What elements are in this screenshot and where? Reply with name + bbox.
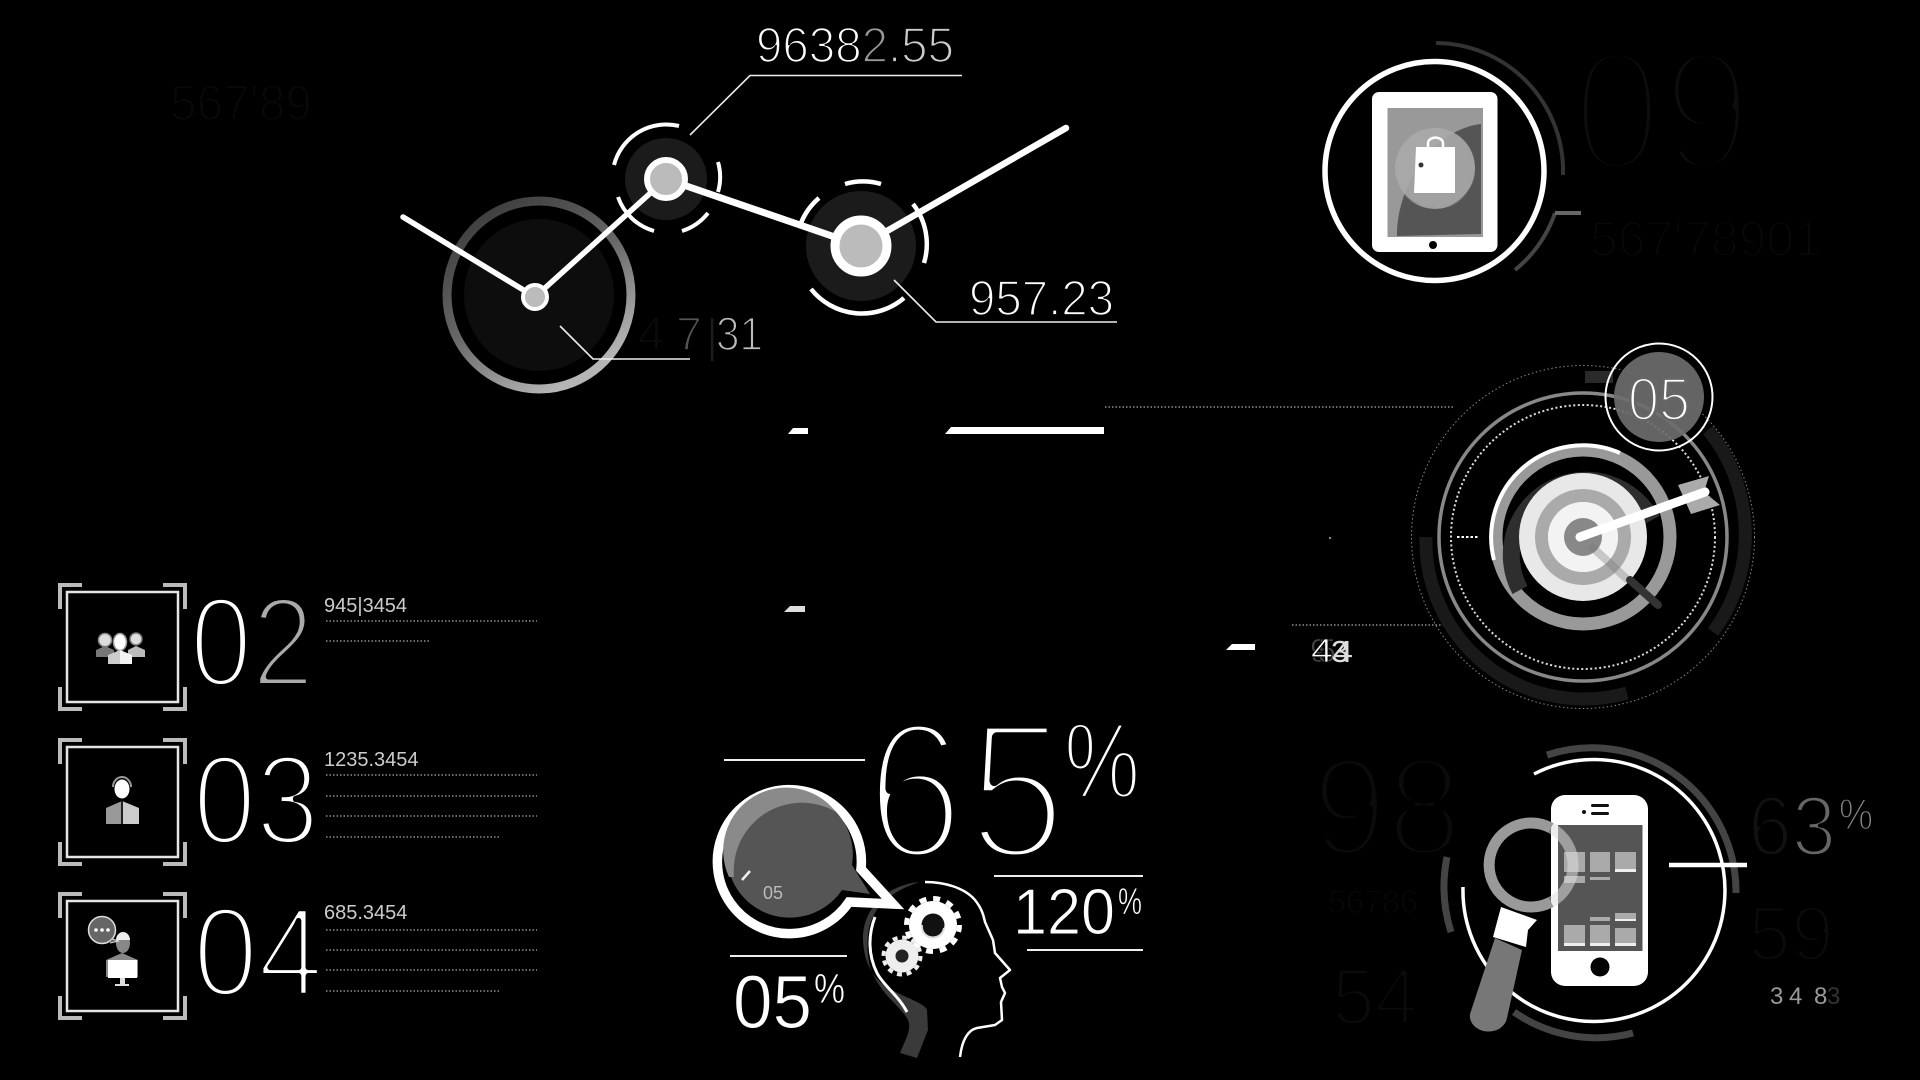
badge: 05: 05: [1628, 366, 1690, 433]
back band: [863, 882, 928, 1058]
phone panel: [1444, 748, 1747, 1038]
stat: 63%: %: [1839, 790, 1873, 839]
circle outline: [1325, 62, 1544, 280]
glitch bars and fragments: [784, 407, 1453, 650]
list row 02: [60, 571, 537, 713]
back highlight: [870, 917, 907, 1012]
faint numbers: phone panel: 54: [1332, 952, 1418, 1041]
value: 957.23: 957.23: [969, 272, 1114, 326]
faint number: 09: 09: [1572, 15, 1752, 207]
magnifying glass: [1470, 823, 1573, 1032]
head outline: [925, 882, 1010, 1057]
head with gears: [863, 882, 1010, 1058]
icon: large gear: [906, 898, 960, 952]
number 03: 03: [193, 729, 319, 871]
digits: 3 4 8 3: [1770, 983, 1840, 1010]
stat: 05%: [730, 956, 847, 1044]
tablet icon panel: [1325, 43, 1581, 280]
value: 957.23: [894, 272, 1117, 326]
bullseye: [1491, 445, 1670, 624]
overlapping digits: 43: 3: [1331, 634, 1349, 669]
icon: support person: [88, 916, 138, 986]
frame with team icon: [60, 585, 185, 709]
list row 04: [60, 881, 537, 1023]
node halo: second point: [614, 124, 720, 231]
node: second point: [647, 160, 685, 198]
label and lines: 945|3454: [324, 595, 407, 617]
value: 47|31: [560, 307, 763, 362]
target panel: [1412, 344, 1754, 708]
stat: 05%: 05: [733, 960, 812, 1044]
overlapping digits: 43: 4: [1333, 634, 1353, 669]
trend line: [403, 128, 1066, 297]
arrow: [1580, 476, 1720, 537]
faint numbers: phone panel: 59: [1748, 889, 1834, 977]
stat: 65%: 5: [968, 681, 1066, 900]
icon: person: [106, 777, 139, 824]
faint number: 567'78901: 567'78901: [1590, 211, 1822, 267]
shopping bag icon: [1414, 138, 1455, 193]
value: 96382.55: [690, 19, 962, 135]
stat: 120%: %: [1118, 881, 1142, 922]
faint numbers: phone panel: 56786: [1328, 884, 1418, 920]
node: third point: [835, 220, 887, 272]
speech bubble: 05: [763, 883, 783, 903]
stat: 63%: 63: [1748, 779, 1836, 873]
digits: 3 4 8 3: 4: [1789, 983, 1802, 1010]
value: 47|31: 31: [716, 307, 763, 360]
phone device: [1551, 795, 1648, 986]
faint numbers: phone panel: [1312, 728, 1834, 1041]
overlapping digits: 43: 9.5: [1310, 632, 1336, 669]
app tiles: [1564, 852, 1636, 946]
stat: 05%: %: [814, 965, 845, 1012]
frame with person icon: [60, 740, 185, 864]
number 02: 02: [190, 571, 314, 713]
outer arcs: [1436, 43, 1581, 270]
icon: small gear: [884, 938, 920, 974]
digits: 3 4 8 3: 3: [1827, 983, 1840, 1010]
overlapping digits: 43: [1310, 632, 1353, 669]
value: 47|31: 4: [638, 307, 664, 360]
pointer line: [1669, 863, 1747, 867]
label and lines: [324, 749, 537, 837]
hud rings: [1412, 366, 1754, 708]
frame with support icon: [60, 894, 185, 1018]
stat: 120%: 120: [1013, 875, 1115, 948]
overlapping digits: 43: 4: [1311, 632, 1333, 669]
node: first point: [523, 285, 547, 309]
list row 03: [60, 729, 537, 871]
node halo: third point: [801, 181, 927, 314]
stat: 65%: %: [1064, 700, 1140, 821]
icon: team: [96, 633, 145, 664]
digits: 3 4 8 3: 3: [1770, 983, 1783, 1010]
label and lines: 685.3454: [324, 902, 407, 924]
faint label: top left: 567'89: [170, 75, 312, 131]
tablet device: [1372, 92, 1498, 252]
label and lines: 1235.3454: [324, 749, 419, 771]
stat: 65%: 6: [866, 681, 964, 900]
value: 47|31: 7: [676, 307, 702, 360]
outer arcs: [1444, 748, 1736, 1038]
line chart panel: [403, 124, 1066, 389]
value: 96382.55: 96382.55: [756, 19, 954, 73]
faint numbers: phone panel: 98: [1312, 728, 1462, 885]
white ring: [1463, 759, 1725, 1021]
number 04: 04: [193, 881, 323, 1023]
speech bubble: [717, 788, 893, 934]
label and lines: [324, 902, 537, 991]
digits: 3 4 8 3: 8: [1814, 983, 1827, 1010]
stat: 65%: [724, 681, 1140, 900]
value: 47|31: |: [706, 309, 718, 362]
badge: 05: [1606, 344, 1712, 450]
node halo: first point: [447, 201, 631, 389]
label and lines: [324, 595, 537, 641]
